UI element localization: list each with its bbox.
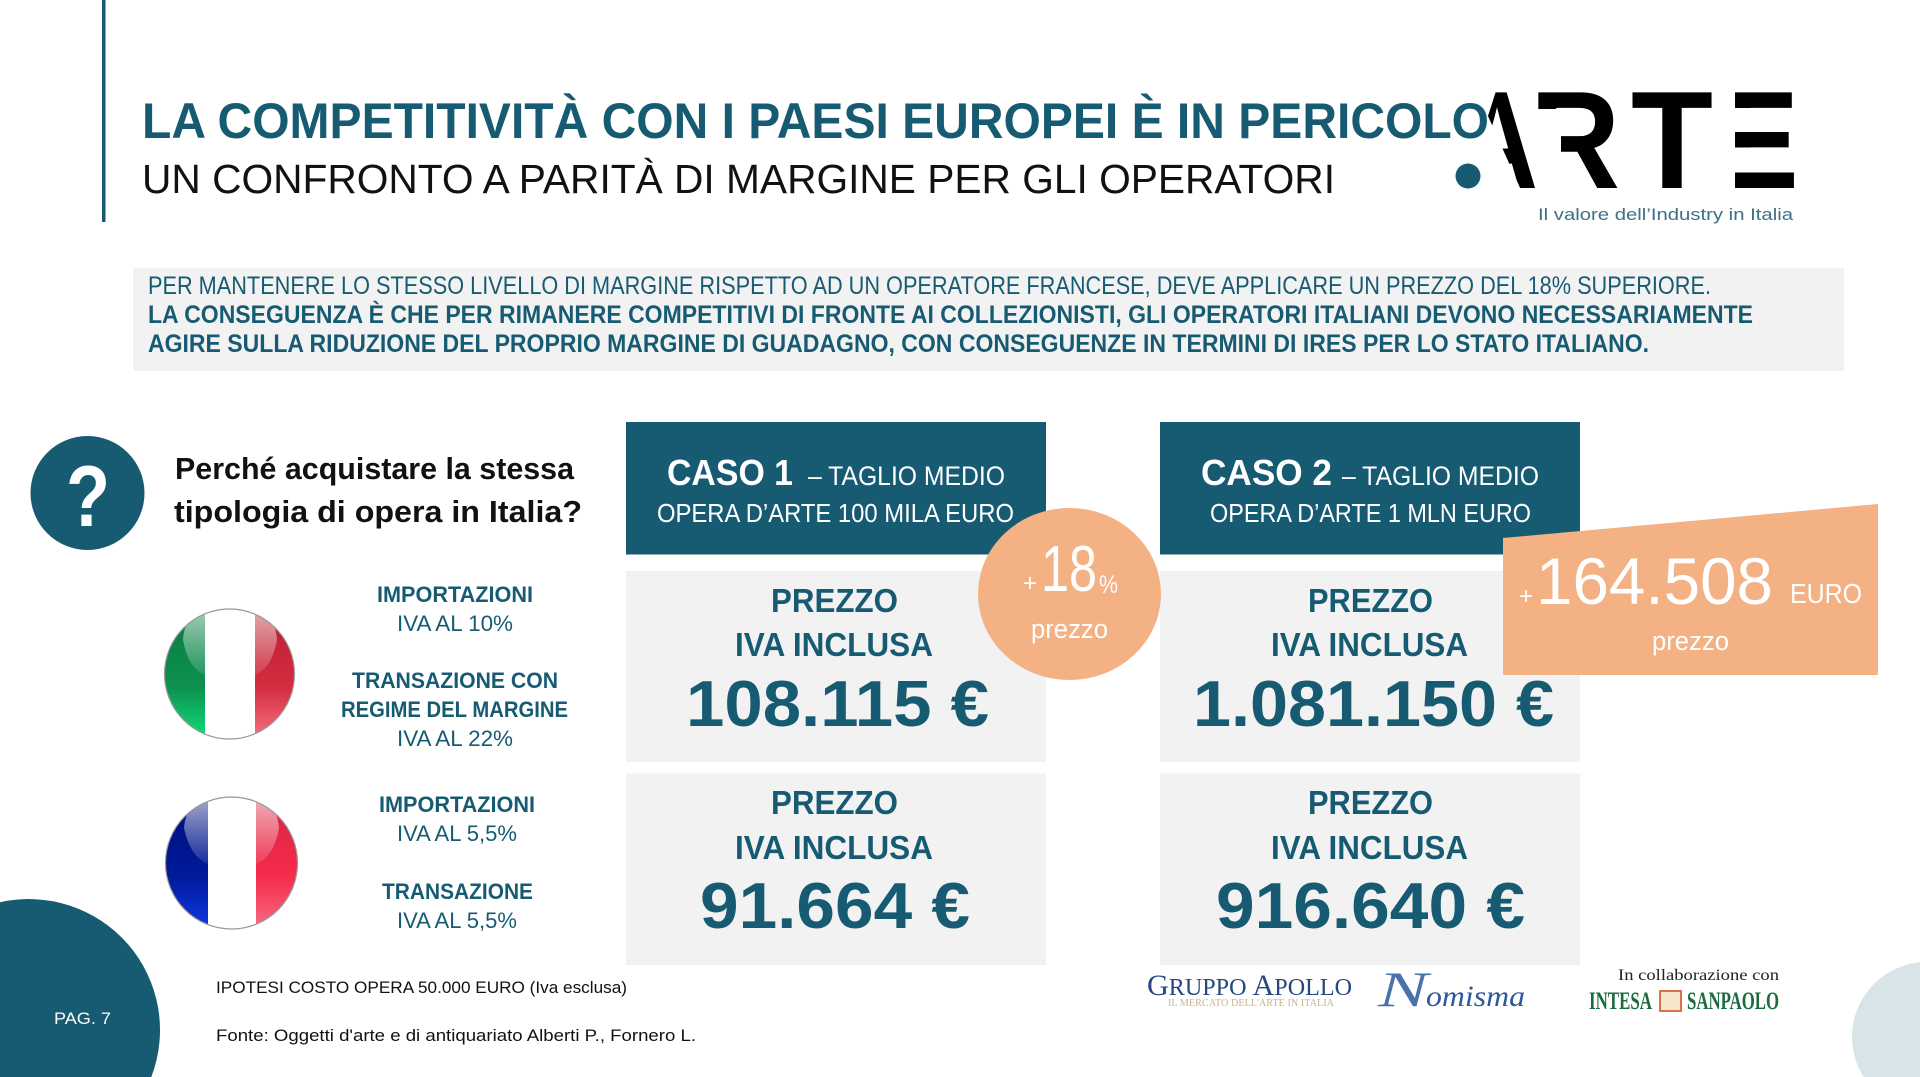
panel: caso 1 price Italy: PREZZO [771, 582, 898, 619]
question heading [174, 451, 582, 529]
panel: caso 2 price France: 916.640 € [1216, 869, 1525, 942]
France tax text: IVA AL 5,5% [397, 821, 517, 846]
logo: ARTE: T [1631, 63, 1713, 218]
callout: +164.508 euro prezzo: 164.508 [1536, 544, 1773, 618]
Italy tax text: IMPORTAZIONI [377, 582, 533, 607]
callout: +164.508 euro prezzo [1503, 504, 1878, 675]
panel: caso 2 price Italy: PREZZO [1308, 582, 1433, 619]
panel: caso 2 price France: IVA INCLUSA [1271, 829, 1468, 866]
panel: caso 2 price France: PREZZO [1308, 784, 1433, 821]
France tax text: TRANSAZIONE [382, 879, 533, 904]
logo: ARTE: A [1456, 63, 1538, 218]
panel: caso 1 price Italy: IVA INCLUSA [735, 626, 933, 663]
icon: question mark: ? [66, 449, 110, 545]
note: source: Fonte: Oggetti d'arte e di antiquariato Alberti P., Fornero L. [216, 1026, 696, 1045]
panel: caso 2 price Italy: 1.081.150 € [1193, 667, 1554, 740]
panel: caso 2 price France [1160, 774, 1580, 965]
panel: caso 2 header [1160, 422, 1580, 554]
header accent line [102, 0, 106, 222]
callout: +18% prezzo: + [1023, 570, 1037, 597]
panel: caso 1 header: OPERA D’ARTE 100 MILA EURO [657, 498, 1014, 528]
Italy tax text: IVA AL 10% [397, 611, 513, 636]
panel: caso 1 header: CASO 1 [667, 452, 793, 493]
question heading: Perché acquistare la stessa [175, 451, 575, 486]
question heading: tipologia di opera in Italia? [174, 494, 582, 529]
logo: Intesa Sanpaolo: In collaborazione con [1618, 967, 1779, 984]
note: hypothesis: IPOTESI COSTO OPERA 50.000 EURO (Iva esclusa) [216, 978, 627, 997]
callout: +18% prezzo: prezzo [1031, 614, 1108, 644]
panel: caso 1 price Italy [626, 571, 1046, 762]
Italy tax text: TRANSAZIONE CON [352, 668, 558, 693]
panel: caso 2 price Italy [1160, 571, 1580, 762]
icon: question mark [30, 436, 144, 550]
callout: +164.508 euro prezzo: + [1519, 583, 1533, 610]
title: LA COMPETITIVITÀ CON I PAESI EUROPEI È IN PERICOLO [142, 93, 1489, 149]
panel: caso 1 price France: PREZZO [771, 784, 898, 821]
panel: intro text: AGIRE SULLA RIDUZIONE DEL PROPRIO MARGINE DI GUADAGNO, CON CONSEGUENZE IN TERMINI DI IRES PER LO STATO ITALIANO. [148, 330, 1649, 358]
panel: caso 1 header: – TAGLIO MEDIO [808, 461, 1005, 491]
France tax text: IVA AL 5,5% [397, 908, 517, 933]
icon: French flag [165, 796, 299, 930]
logo: Intesa Sanpaolo: INTESA [1589, 988, 1652, 1015]
logo: Gruppo Apollo: GRUPPO APOLLO [1147, 969, 1352, 1002]
panel: caso 1 header [626, 422, 1046, 554]
logo: Intesa Sanpaolo: SANPAOLO [1687, 988, 1779, 1015]
logo: ARTE [1450, 63, 1800, 224]
Italy tax text: REGIME DEL MARGINE [341, 697, 568, 722]
panel: intro text: PER MANTENERE LO STESSO LIVELLO DI MARGINE RISPETTO AD UN OPERATORE FRANCESE, DEVE APPLICARE UN PREZZO DEL 18% SUPERIORE. [148, 272, 1711, 300]
bottom-left decorative circle [0, 899, 160, 1077]
page number: PAG. 7 [54, 1009, 111, 1028]
icon: Italian flag [164, 608, 296, 740]
logo: Nomisma: N [1377, 961, 1432, 1017]
logo: ARTE: Il valore dell’Industry in Italia [1538, 205, 1794, 224]
panel: caso 1 price France [626, 774, 1046, 965]
logo: Nomisma: omisma [1426, 980, 1525, 1013]
panel: caso 1 price France: 91.664 € [700, 869, 970, 942]
logo: ARTE: E [1728, 63, 1798, 218]
subtitle: UN CONFRONTO A PARITÀ DI MARGINE PER GLI OPERATORI [142, 156, 1335, 202]
France tax text: IMPORTAZIONI [379, 792, 535, 817]
logo: Intesa Sanpaolo [1589, 967, 1779, 1015]
callout: +164.508 euro prezzo: prezzo [1652, 626, 1729, 656]
France tax text [379, 792, 535, 933]
Italy tax text [341, 582, 568, 751]
Italy tax text: IVA AL 22% [397, 726, 513, 751]
panel: intro text: LA CONSEGUENZA È CHE PER RIMANERE COMPETITIVI DI FRONTE AI COLLEZIONISTI, GLI OPERATORI ITALIANI DEVONO NECESSARIAMENTE [148, 300, 1753, 329]
logo: ARTE: R [1530, 63, 1620, 218]
logo: Nomisma [1377, 961, 1525, 1017]
panel: caso 1 price France: IVA INCLUSA [735, 829, 933, 866]
panel: caso 2 header: CASO 2 [1201, 452, 1332, 493]
bottom-right decorative circle [1852, 962, 1920, 1077]
panel: caso 1 price Italy: 108.115 € [686, 667, 989, 740]
callout: +18% prezzo: % [1099, 571, 1118, 599]
panel: intro text [133, 268, 1844, 371]
panel: caso 2 price Italy: IVA INCLUSA [1271, 626, 1468, 663]
logo: Gruppo Apollo: IL MERCATO DELL'ARTE IN ITALIA [1168, 998, 1335, 1009]
panel: caso 2 header: OPERA D’ARTE 1 MLN EURO [1210, 498, 1531, 528]
callout: +18% prezzo [978, 508, 1161, 680]
callout: +164.508 euro prezzo: EURO [1790, 578, 1862, 609]
panel: caso 2 header: – TAGLIO MEDIO [1342, 461, 1539, 491]
callout: +18% prezzo: 18 [1041, 532, 1097, 605]
